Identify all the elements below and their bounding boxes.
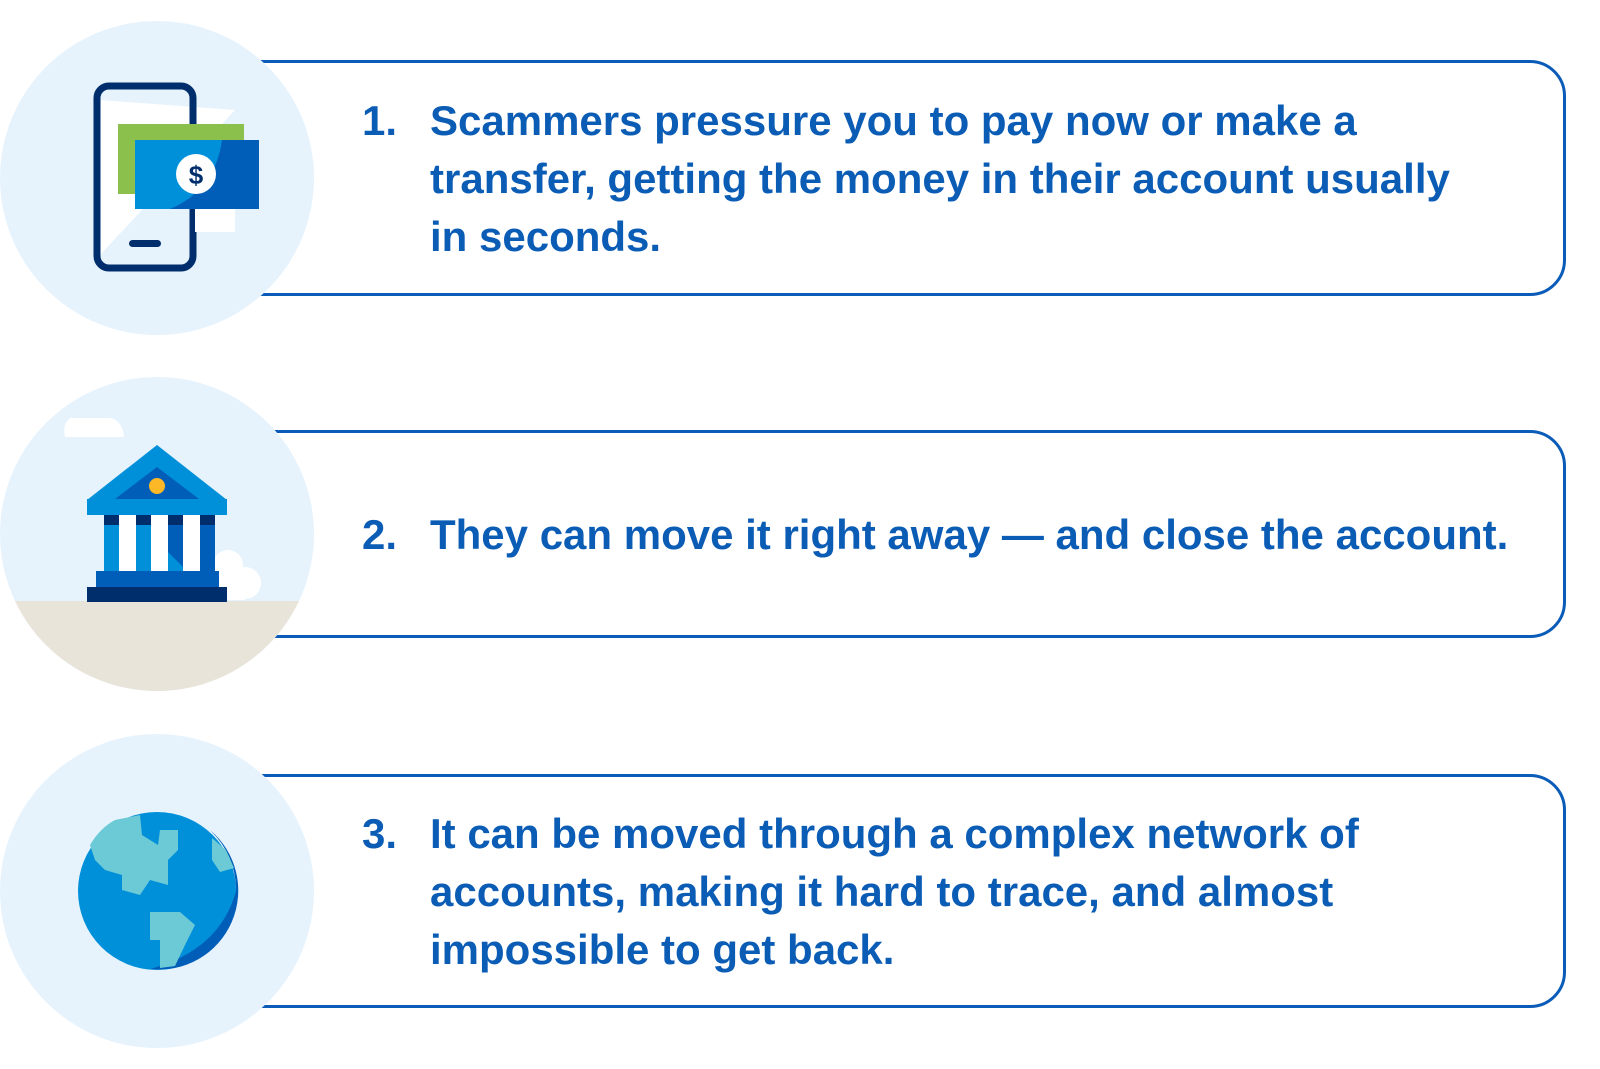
text: step 1: 1.: [362, 97, 397, 144]
text: step 1: in seconds.: [430, 213, 661, 260]
icon: globe: [0, 734, 314, 1048]
icon: phone with money: [0, 21, 314, 335]
text: step 3: accounts, making it hard to trace, and almost: [430, 868, 1333, 915]
panel: step 2 box: [150, 430, 1566, 638]
icon: bank building: [0, 377, 314, 691]
text: step 1: [362, 97, 1450, 260]
text: step 2: 2.: [362, 511, 397, 558]
panel: step 1 box: [150, 60, 1566, 296]
text: step 1: Scammers pressure you to pay now or make a: [430, 97, 1357, 144]
panel: step 3 box: [150, 774, 1566, 1008]
text: step 3: 3.: [362, 810, 397, 857]
text: step 1: transfer, getting the money in their account usually: [430, 155, 1450, 202]
text: step 3: It can be moved through a complex network of: [430, 810, 1359, 857]
text: step 3: impossible to get back.: [430, 926, 894, 973]
text: step 3: [362, 810, 1359, 973]
icon: phone with money: $: [189, 160, 204, 190]
text: step 2: They can move it right away — and close the account.: [430, 511, 1508, 558]
